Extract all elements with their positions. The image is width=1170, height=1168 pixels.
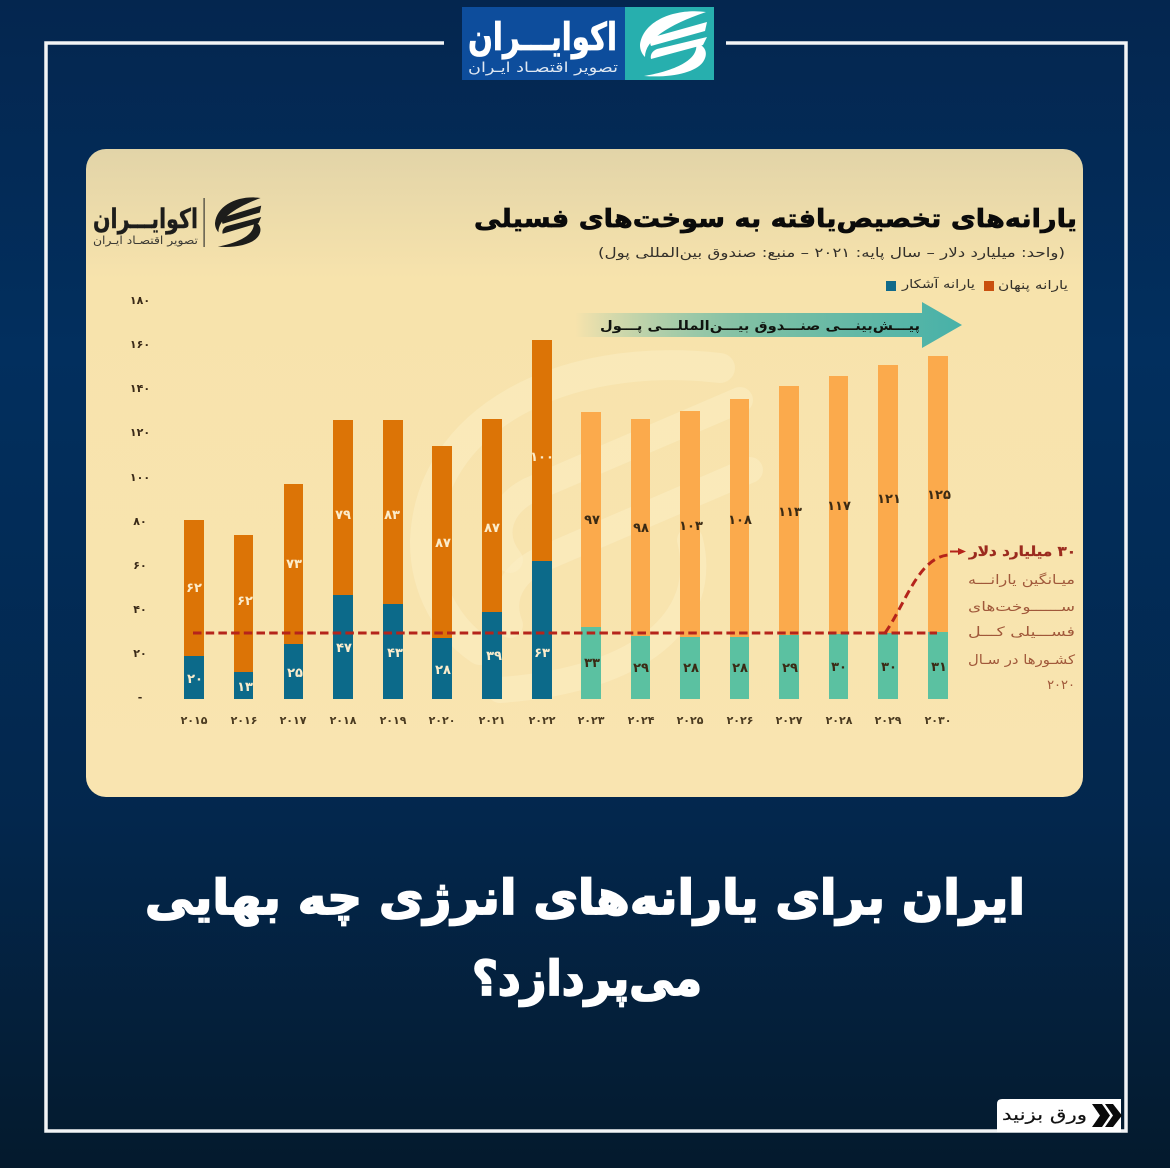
x axis labels: ۲۰۳۰ [925,714,951,727]
x axis labels: ۲۰۲۴ [628,714,655,727]
chart subtitle: (واحد: میلیارد دلار – سال پایه: ۲۰۲۱ – منبع: صندوق بین‌المللی پول) [598,246,1065,261]
value labels: ۴۷ [336,641,352,656]
value labels [186,450,951,695]
swipe icon [1092,1104,1122,1127]
value labels: ۸۳ [384,508,400,523]
watermark swoosh [425,365,750,690]
bars: historical [184,340,552,699]
y axis: ۶۰ [133,559,147,572]
value labels: ۲۹ [633,661,649,676]
callout: فســـیلی کـــل [968,625,1075,640]
x axis labels: ۲۰۱۶ [231,714,257,727]
swipe badge: ورق بزنید [1002,1105,1087,1125]
logo: top header [462,7,714,80]
bar chart [181,340,951,727]
callout [968,544,1076,693]
value labels: ۳۳ [584,656,600,671]
main heading: ایران برای یارانه‌های انرژی چه بهایی [145,870,1025,926]
callout arrow [885,548,966,633]
y axis: ۲۰ [133,647,147,660]
value labels: ۱۳ [237,680,253,695]
x axis labels: ۲۰۲۰ [429,714,455,727]
value labels: ۱۲۱ [877,492,901,507]
value labels: ۸۷ [484,521,500,536]
main heading [145,870,1025,1007]
card logo [93,197,261,247]
x axis labels: ۲۰۱۹ [380,714,407,727]
x axis labels [181,714,951,727]
value labels: ۲۵ [287,666,303,681]
value labels: ۲۸ [732,661,748,676]
y axis: - [138,691,142,704]
forecast arrow [575,302,962,348]
x axis labels: ۲۰۱۸ [330,714,357,727]
value labels: ۱۰۰ [530,450,554,465]
y axis: ۸۰ [133,515,147,528]
legend: یارانه پنهان [998,278,1068,293]
main heading: می‌پردازد؟ [472,951,702,1007]
y axis: ۱۲۰ [130,426,150,439]
value labels: ۱۰۸ [728,513,752,528]
value labels: ۱۲۵ [927,488,951,503]
value labels: ۲۸ [683,661,699,676]
swipe badge [997,1099,1122,1132]
x axis labels: ۲۰۱۷ [280,714,307,727]
value labels: ۳۱ [931,660,947,675]
card logo tagline: تصویر اقتصـاد ایـران [93,234,198,247]
value labels: ۷۳ [286,557,302,572]
x axis labels: ۲۰۲۶ [727,714,753,727]
value labels: ۳۰ [881,660,897,675]
y axis: ۱۴۰ [130,382,150,395]
x axis labels: ۲۰۲۹ [875,714,902,727]
callout: ۲۰۲۰ [1047,678,1075,693]
value labels: ۹۸ [633,521,649,536]
callout: ۳۰ میلیارد دلار [968,544,1076,560]
y axis: ۱۸۰ [130,294,150,307]
x axis labels: ۲۰۲۳ [578,714,605,727]
card logo icon [215,197,261,247]
value labels: ۲۰ [187,672,203,687]
value labels: ۱۱۳ [778,505,802,520]
callout: میـانگین یارانـــه [968,572,1075,588]
y axis [130,294,150,704]
value labels: ۶۳ [534,646,550,661]
chart title: یارانه‌های تخصیص‌یافته به سوخت‌های فسیلی [474,204,1077,234]
value labels: ۷۹ [335,508,351,523]
value labels: ۶۲ [186,581,202,596]
y axis: ۱۶۰ [130,338,150,351]
y axis: ۴۰ [133,603,147,616]
panel: chart card [86,149,1083,797]
logo tagline: تصویر اقتصـاد ایـران [468,60,618,76]
x axis labels: ۲۰۲۵ [677,714,704,727]
forecast arrow: پیـــش‌بینـــی صنـــدوق بیـــن‌المللـــی پـــول [600,319,920,334]
callout: ســــــوخت‌های [968,600,1075,615]
card logo wordmark: اکوایـــران [93,204,198,235]
value labels: ۴۳ [387,646,403,661]
x axis labels: ۲۰۲۸ [826,714,853,727]
y axis: ۱۰۰ [130,471,150,484]
value labels: ۸۷ [435,536,451,551]
x axis labels: ۲۰۲۲ [529,714,556,727]
x axis labels: ۲۰۲۷ [776,714,803,727]
legend: یارانه آشکار [901,276,975,292]
x axis labels: ۲۰۲۱ [479,714,505,727]
logo wordmark: اکوایـــران [468,15,617,59]
average dashed line [193,632,937,634]
x axis labels: ۲۰۱۵ [181,714,208,727]
callout: کشـورها در سـال [968,653,1076,668]
value labels: ۱۱۷ [827,499,851,514]
legend [886,276,1068,293]
value labels: ۶۲ [237,594,253,609]
value labels: ۲۸ [435,663,451,678]
logo icon [640,11,707,76]
value labels: ۳۹ [486,649,502,664]
value labels: ۹۷ [584,513,600,528]
value labels: ۳۰ [831,660,847,675]
bars: forecast [581,356,948,699]
value labels: ۲۹ [782,661,798,676]
value labels: ۱۰۳ [679,519,703,534]
